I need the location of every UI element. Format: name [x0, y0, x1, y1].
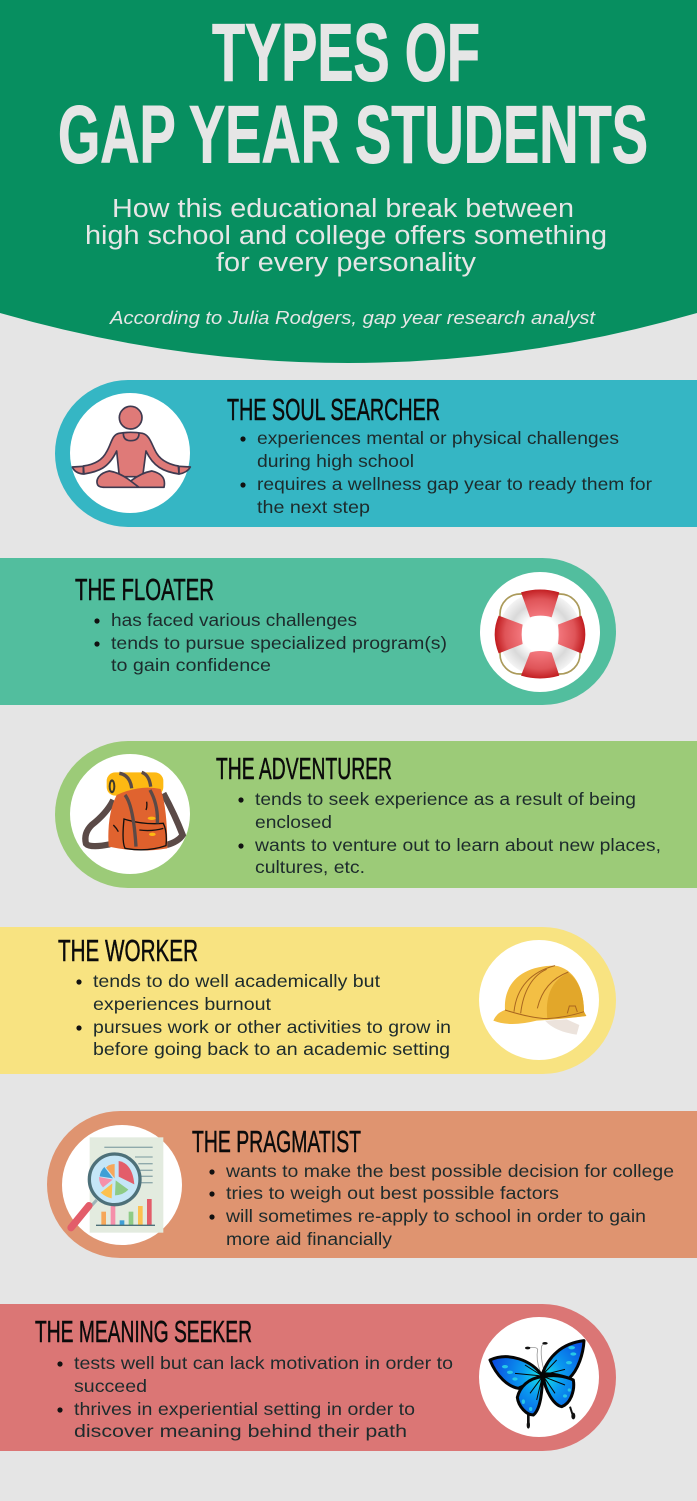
- bullet list: tends to seek experience as a result of being: [255, 789, 636, 809]
- bullet list: tests well but can lack motivation in order to: [74, 1353, 453, 1373]
- bullet list: requires a wellness gap year to ready them for: [257, 474, 652, 494]
- attribution: According to Julia Rodgers, gap year research analyst: [109, 308, 596, 328]
- panel: the worker: [0, 927, 616, 1074]
- bullet list: tends to pursue specialized program(s): [111, 633, 447, 653]
- panel: the floater: [0, 558, 616, 705]
- heading: THE MEANING SEEKER: [35, 1314, 252, 1349]
- bullet list: tends to do well academically but: [93, 971, 380, 991]
- subtitle: How this educational break between: [112, 195, 574, 223]
- bullet list: tries to weigh out best possible factors: [226, 1183, 559, 1203]
- title: TYPES OF: [212, 8, 480, 98]
- panel: the meaning seeker: [0, 1304, 616, 1451]
- bullet list: more aid financially: [226, 1229, 392, 1249]
- bullet list: before going back to an academic setting: [93, 1039, 450, 1059]
- heading: THE WORKER: [58, 933, 198, 968]
- bullet list: has faced various challenges: [111, 610, 357, 630]
- bullet list: during high school: [257, 451, 414, 471]
- bullet list: succeed: [74, 1376, 147, 1396]
- subtitle: for every personality: [216, 249, 476, 277]
- header banner: [0, 0, 697, 363]
- subtitle: high school and college offers something: [85, 222, 607, 250]
- bullet list: pursues work or other activities to grow in: [93, 1017, 451, 1037]
- panel: the pragmatist: [47, 1111, 697, 1258]
- bullet list: experiences mental or physical challenges: [257, 428, 619, 448]
- heading: THE FLOATER: [75, 572, 214, 607]
- heading: THE PRAGMATIST: [192, 1124, 361, 1159]
- panel: the adventurer: [55, 741, 697, 888]
- bullet list: experiences burnout: [93, 994, 271, 1014]
- bullet list: [94, 610, 447, 675]
- icon: meditating person: [72, 406, 190, 487]
- bullet list: to gain confidence: [111, 655, 271, 675]
- subtitle: [85, 195, 607, 277]
- heading: THE SOUL SEARCHER: [227, 392, 440, 427]
- icon: magnifying glass over report: [71, 1137, 163, 1233]
- bullet list: [76, 971, 451, 1059]
- bullet list: [238, 789, 661, 877]
- panel: the soul searcher: [55, 380, 697, 527]
- icon: hard hat: [493, 966, 586, 1035]
- bullet list: wants to venture out to learn about new places,: [254, 835, 661, 855]
- bullet list: [209, 1161, 674, 1249]
- bullet list: cultures, etc.: [255, 857, 365, 877]
- bullet list: wants to make the best possible decision for college: [225, 1161, 674, 1181]
- bullet list: will sometimes re-apply to school in order to gain: [225, 1206, 646, 1226]
- icon: blue butterfly: [490, 1341, 584, 1429]
- icon: life ring: [495, 589, 585, 678]
- bullet list: [240, 428, 652, 517]
- bullet list: discover meaning behind their path: [74, 1421, 407, 1441]
- bullet list: the next step: [257, 497, 370, 517]
- bullet list: enclosed: [255, 812, 332, 832]
- bullet list: [57, 1353, 453, 1441]
- icon: backpack: [85, 772, 183, 850]
- heading: THE ADVENTURER: [216, 751, 392, 786]
- title: [58, 8, 648, 180]
- bullet list: thrives in experiential setting in order to: [74, 1399, 415, 1419]
